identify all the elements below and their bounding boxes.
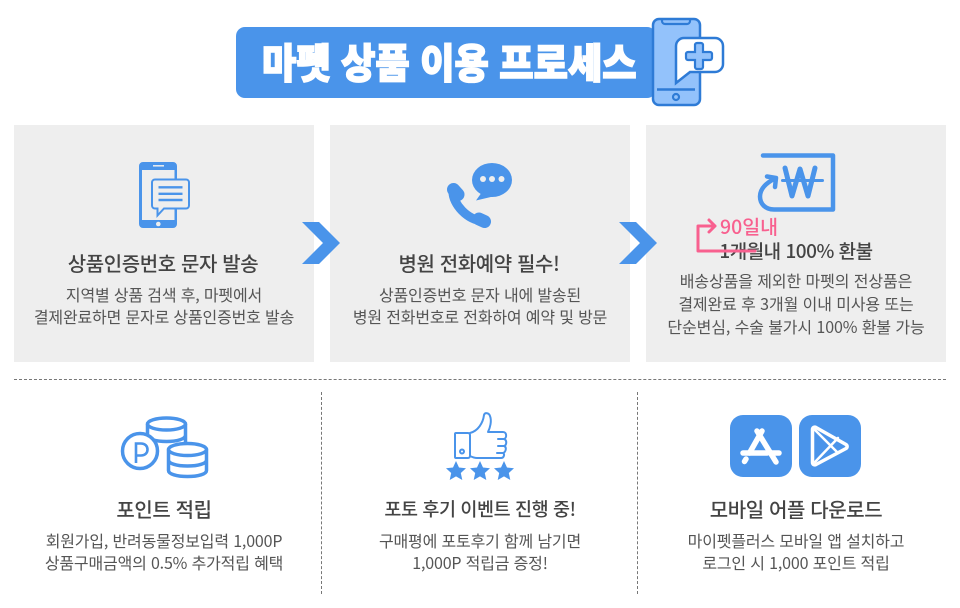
body text: 상품인증번호 문자 내에 발송된: [379, 282, 581, 306]
heading: 포토 후기 이벤트 진행 중!: [384, 496, 576, 522]
body text: 로그인 시 1,000 포인트 적립: [702, 550, 890, 574]
divider: [14, 379, 946, 380]
title banner: [236, 27, 656, 98]
icon: phone message: [139, 162, 190, 228]
body text: [688, 528, 904, 574]
heading: 모바일 어플 다운로드: [710, 494, 882, 523]
body text: 상품구매금액의 0.5% 추가적립 혜택: [45, 550, 283, 574]
body text: 1,000P 적립금 증정!: [412, 550, 548, 574]
body text: 결제완료하면 문자로 상품인증번호 발송: [34, 304, 294, 328]
pink correction: 90일내: [720, 211, 778, 240]
icon: phone with plus bubble: [652, 18, 724, 106]
heading: 상품인증번호 문자 발송: [68, 248, 258, 277]
icon: phone call bubble: [447, 163, 512, 228]
panel: mobile app download: [688, 415, 904, 574]
arrow: step one to two: [302, 222, 340, 264]
body text: [353, 282, 607, 328]
body text: 회원가입, 반려동물정보입력 1,000P: [46, 528, 282, 552]
heading: 병원 전화예약 필수!: [399, 248, 559, 277]
panel: refund: [646, 125, 946, 362]
pink correction: [696, 211, 778, 252]
heading: 1개월내 100% 환불: [719, 237, 873, 264]
body text: 배송상품을 제외한 마펫의 전상품은: [680, 268, 912, 292]
body text: 지역별 상품 검색 후, 마펫에서: [66, 282, 262, 306]
body text: 단순변심, 수술 불가시 100% 환불 가능: [667, 314, 925, 338]
icon: won refund: [758, 153, 836, 212]
divider: [321, 392, 322, 594]
divider: [637, 392, 638, 594]
icon: google play: [799, 415, 861, 477]
icon: app store: [730, 415, 792, 477]
panel: points: [45, 416, 283, 574]
title text: 마펫 상품 이용 프로세스: [262, 30, 637, 90]
panel: phone reservation: [330, 125, 630, 362]
body text: 결제완료 후 3개월 이내 미사용 또는: [678, 291, 914, 315]
body text: 마이펫플러스 모바일 앱 설치하고: [688, 528, 904, 552]
panel: photo review: [379, 412, 581, 574]
body text: [379, 528, 581, 574]
body text: 병원 전화번호로 전화하여 예약 및 방문: [353, 304, 607, 328]
body text: 구매평에 포토후기 함께 남기면: [379, 528, 581, 552]
body text: [45, 528, 283, 574]
heading: 포인트 적립: [116, 494, 212, 523]
body text: [667, 268, 925, 338]
arrow: step two to three: [619, 222, 657, 264]
icon: thumbs up and stars: [446, 412, 514, 480]
icon: coins: [120, 416, 208, 478]
panel: SMS verification: [14, 125, 314, 362]
body text: [34, 282, 294, 328]
